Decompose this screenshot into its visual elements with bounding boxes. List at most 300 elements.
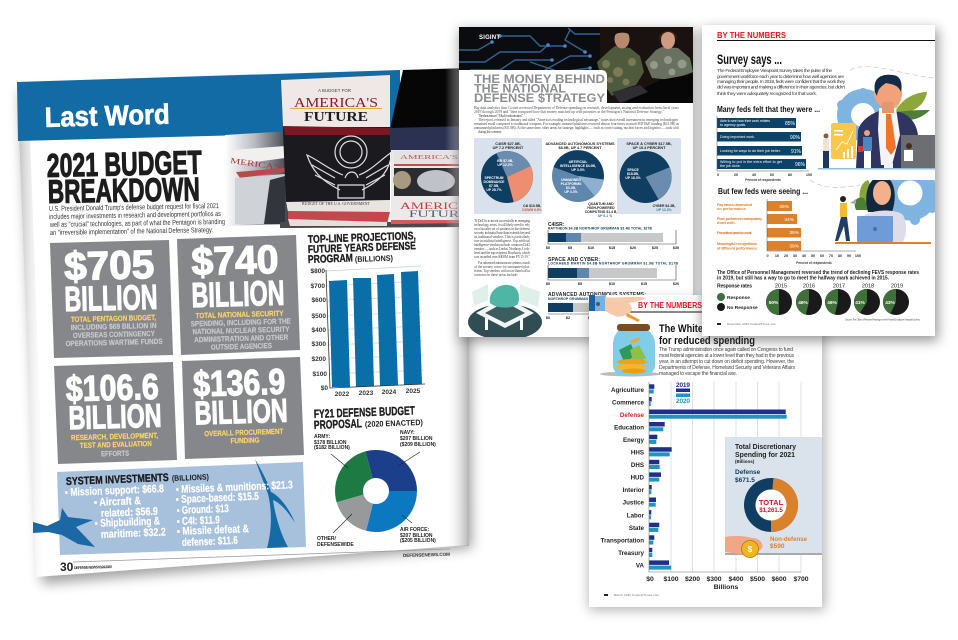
stat card: $740 billion: SPENDING, INCLUDING FOR THE [191, 317, 291, 328]
stacked bar: advanced autonomous systems vendors: NORTHROP GRUMMAN [548, 297, 589, 301]
category labels: Labor [627, 512, 645, 520]
page footer [60, 549, 450, 574]
bar chart: few feds seeing: 34% [784, 217, 795, 223]
icon: hand holding coin: $ [748, 545, 753, 554]
stacked bar: C4ISR vendors: C4ISR: [548, 222, 565, 228]
system investments list: related: $56.9 [101, 506, 158, 520]
bar chart: few feds seeing: 30 [793, 254, 797, 258]
bar chart: few feds seeing: 28% [779, 204, 790, 210]
category labels: Energy [623, 437, 645, 444]
bar chart: future years defense program: $500 [312, 313, 326, 320]
stat card: $740 billion: BILLION [191, 274, 285, 315]
body text: second column: security industrial base than extends beyond [474, 231, 530, 235]
title: The Money Behind the National Defense $trategy: DEFENSE $TRATEGY [474, 93, 605, 105]
stat card: $136.9 billion: OVERALL PROCUREMENT [204, 427, 284, 438]
body text: managed to escape the financial axe. [659, 371, 737, 377]
panel: C4ISR pie: UP 7.2 PERCENT [493, 146, 524, 150]
panel: space and cyber pie: UP 12.2% [656, 208, 672, 212]
bar chart: few feds seeing [717, 199, 861, 265]
axis labels: $300 [706, 576, 722, 583]
bar chart: many feds felt: 80 [788, 173, 792, 177]
axis labels: $600 [771, 576, 787, 583]
stacked bar: C4ISR vendors: $0 [546, 246, 550, 250]
bar chart: few feds seeing: of different performance. [717, 246, 758, 250]
bar chart: many feds felt: Looking for ways to do their job better. [720, 149, 781, 153]
body text: second column: on a broader set of partners in the defense [474, 227, 530, 231]
photo: budget books: AMERICA'S [294, 96, 378, 111]
stat card: $136.9 billion: FUNDING [230, 435, 260, 445]
body text: intro: during the winners: [478, 130, 502, 134]
bar chart: few feds seeing: 100 [855, 254, 861, 258]
photo: budget books: BUDGET OF THE U.S. GOVERNMENT [302, 202, 371, 206]
illustration: isometric brain platform [468, 284, 542, 340]
stacked bar: space and cyber vendors: $10 [609, 282, 615, 286]
bar chart: many feds felt: 100 [806, 173, 812, 177]
donut labels: $178 BILLION [314, 440, 347, 446]
icon: hand dropping coin [589, 295, 646, 322]
stacked bar: advanced autonomous systems vendors: $4 [588, 316, 593, 320]
heading: FY21 defense budget proposal: PROPOSAL [314, 416, 362, 432]
axis labels: $700 [793, 576, 809, 583]
panel: advanced autonomous systems pie: QUANTUM AND [588, 202, 614, 206]
panel: advanced autonomous systems pie: PLATFORMS [561, 182, 582, 186]
bar chart: many feds felt: Doing important work. [720, 135, 755, 139]
body text: second column: true in artificial intelligence. Top artificial [474, 239, 530, 243]
panel: advanced autonomous systems pie: UNMANNED [561, 178, 581, 182]
panel: C4ISR pie: UP 12.2% [497, 163, 513, 167]
bar chart: future years defense program: $400 [312, 327, 326, 334]
donut labels: $207 BILLION [400, 533, 433, 539]
bar chart: few feds seeing: dealt with. [717, 221, 736, 225]
system investments list: ▪ Missile defeat & [177, 523, 249, 538]
panel: C4ISR pie: SPECTRUM [484, 176, 504, 180]
page footer: December 2020 FederalTimes.com [727, 322, 777, 326]
stat card: $705 billion: OPERATIONS WARTIME FUNDS [65, 337, 163, 348]
donut labels: OTHER/ [317, 536, 336, 542]
donut: defense vs non-defense [744, 478, 798, 532]
panel: Last Word magazine page [17, 68, 472, 584]
pie charts: response rates by year: 41% [855, 300, 866, 306]
body text: second column: contracts in these areas include: [474, 273, 518, 277]
legend: 2019 and 2020 [676, 382, 690, 405]
bar chart: many feds felt: to agency goals. [720, 123, 746, 127]
stacked bar: advanced autonomous systems vendors: $2 [566, 316, 570, 320]
callout: total discretionary spending: Non-defense [770, 536, 807, 543]
bar chart: agency spending [601, 382, 809, 591]
category labels: Defense [620, 412, 645, 419]
body text: intro: unmanned platforms ($11.9B). At the same time, other areas for strategic highlights — such as cross-cutting, nuclear forces and logistics — took a hit [474, 126, 680, 131]
bar chart: few feds seeing: 40 [802, 254, 806, 258]
label: By the numbers: BY THE NUMBERS [638, 301, 703, 310]
heading: FY21 defense budget proposal [314, 403, 423, 432]
stacked bar: advanced autonomous systems vendors: ADVANCED AUTONOMOUS SYSTEMS: [548, 292, 646, 298]
legend: response rates: No Response [727, 305, 758, 311]
body text: second column: technology areas, it will likely need to rely [474, 223, 530, 228]
callout: total discretionary spending: (Billions) [735, 459, 755, 464]
body text: second column: For advanced autonomous systems, much [478, 261, 530, 266]
bar chart: many feds felt: 60 [770, 173, 774, 177]
donut: defense vs non-defense: TOTAL [759, 498, 784, 507]
bar chart: future years defense program [311, 266, 425, 398]
panel: advanced autonomous systems pie: $8.9B, UP 4.7 PERCENT [559, 146, 602, 150]
system investments list: ▪ Space-based: $15.5 [176, 491, 259, 506]
bar chart: future years defense program: $200 [312, 356, 326, 363]
axis labels: $0 [646, 576, 654, 583]
stacked bar: C4ISR vendors: $25 [652, 246, 658, 250]
callout: total discretionary spending: $590 [770, 543, 785, 550]
stat card: $136.9 billion: $136.9 [193, 361, 286, 405]
stacked bar: advanced autonomous systems vendors [546, 292, 676, 320]
system investments heading: SYSTEM INVESTMENTS [66, 472, 169, 488]
bar chart: few feds seeing: 50 [811, 254, 815, 258]
category labels: HHS [631, 450, 644, 456]
page footer: DEFENSE NEWS 03.24.2020 [74, 565, 112, 570]
pie charts: response rates by year [766, 284, 909, 315]
callout: total discretionary spending: Total Discretionary [735, 444, 796, 451]
panel: system investments [33, 459, 306, 555]
donut labels [314, 430, 436, 548]
category labels: DHS [631, 462, 644, 469]
panel: advanced autonomous systems pie: ARTIFICIAL [569, 160, 587, 164]
bar chart: future years defense program: $700 [311, 283, 325, 290]
category labels: Justice [623, 500, 645, 506]
header band: Last Word [17, 70, 400, 141]
legend: response rates: Response [727, 295, 750, 301]
text block: OPM response rates note [717, 270, 919, 282]
stacked bar: space and cyber vendors: SPACE AND CYBER: [548, 257, 600, 263]
stacked bar: C4ISR vendors: $5 [568, 246, 572, 250]
category labels: Treasury [618, 550, 645, 557]
illustration: businessman with gear and charts [818, 67, 935, 170]
bar chart: future years defense program: $300 [312, 341, 326, 348]
panel: advanced autonomous systems pie [545, 142, 617, 218]
pie charts: response rates by year: 2017 [833, 284, 845, 290]
panel: advanced autonomous systems pie: COMPUTING $1.4 B, [585, 210, 617, 214]
page footer: Source: The Office of Personnel Management's Federal Employee Viewpoint Survey [845, 318, 921, 322]
bar chart: future years defense program: 2024 [382, 389, 397, 396]
legend: 2019 and 2020: 2020 [676, 398, 690, 405]
intro paragraph: includes major investments in research and development portfolios as [49, 209, 221, 221]
pie charts: response rates by year: 2019 [891, 284, 903, 290]
heading: top-line projections: PROGRAM [308, 252, 353, 266]
panel: advanced autonomous systems pie: UP 6.1 % [598, 214, 612, 218]
system investments list: ▪ Shipbuilding & [95, 515, 160, 530]
bar chart: many feds felt [717, 116, 812, 182]
bar chart: few feds seeing: 39% [789, 244, 800, 250]
photo: budget books [225, 68, 469, 228]
body text: The Federal Employee Viewpoint Survey takes the pulse of the [717, 68, 832, 74]
stat card: $106.6 billion: BILLION [68, 397, 162, 436]
stacked bar: space and cyber vendors [546, 257, 679, 286]
system investments list: defense: $11.6 [182, 535, 238, 549]
body text: intro [474, 106, 680, 134]
stat card: $106.6 billion: EFFORTS [101, 449, 129, 458]
text block: OPM response rates note: The Office of Personnel Management reversed the trend of declining FEVS response rates [717, 270, 919, 276]
header band: Last Word: Last Word [44, 99, 170, 133]
heading: The White House calls for reduced spending: The White [659, 323, 703, 335]
callout: total discretionary spending: Defense [735, 469, 761, 476]
title: The Money Behind the National Defense $trategy: THE MONEY BEHIND [474, 74, 605, 86]
panel: advanced autonomous systems pie: INTELLIGENCE $4.0B, [560, 164, 596, 168]
panel: C4ISR pie: ISR $7.9B, [497, 159, 513, 163]
stacked bar: advanced autonomous systems vendors: $0 [546, 316, 550, 320]
body text: government workforce each year to determine how well agencies are [717, 74, 844, 80]
body text: second column: vendors — such as Leidos, Northrop, Lock- [474, 247, 531, 252]
photo: budget books: AMERIC [400, 201, 458, 211]
heading: 2021 Budget Breakdown [46, 143, 202, 210]
stat card: $740 billion: TOTAL NATIONAL SECURITY [195, 309, 284, 320]
bar chart: many feds felt: 0 [717, 173, 719, 177]
bar chart: future years defense program: $100 [313, 371, 327, 378]
body text: second column: its traditional vendors. This is particularly [474, 235, 530, 239]
body text: second column: "If DoD is to invest successfully in emerging [474, 219, 530, 223]
heading: Survey says: Survey says ... [717, 51, 782, 67]
stacked bar: space and cyber vendors: $20 [673, 282, 679, 286]
legend: response rates: Response rates [717, 284, 752, 290]
panel: SIGINT magazine page [459, 27, 695, 342]
heading: But few feds were seeing: But few feds were seeing ... [718, 186, 808, 196]
category labels: HUD [631, 474, 645, 482]
stat card: $740 billion: $740 [191, 238, 279, 284]
icon: money jar [600, 324, 660, 376]
panel: C4ISR pie: C4I $10.5B, [523, 204, 541, 208]
photo: budget books: FUTURE [304, 110, 368, 125]
system investments list: ▪ Mission support: $66.8 [65, 483, 164, 499]
heading: top-line projections: (BILLIONS) [355, 254, 393, 264]
bar chart: many feds felt: 90% [790, 135, 801, 141]
label: SIGINT: SIGINT [479, 35, 500, 41]
donut labels: ($182 BILLION) [314, 445, 350, 451]
body text: intro: 2019 through 2019 and "then compared how that money matched up with priorities in the Pentagon's National Defense Strategy." [474, 110, 664, 114]
body text: intro: The report, released in January and titled "America's eroding technological advantage," notes that overall investment in emerging technologies [478, 118, 679, 123]
stacked bar: space and cyber vendors: LOCKHEED MARTIN $4.8B NORTHROP GRUMMAN $1.9B TOTAL $17B [548, 262, 679, 266]
stat card: $106.6 billion: RESEARCH, DEVELOPMENT, [71, 431, 158, 442]
donut labels: DEFENSEWIDE [317, 542, 354, 548]
donut chart: defense budget by service [314, 430, 436, 548]
axis labels: $100 [663, 576, 679, 583]
panel: C4ISR pie: C4ISR $27.8B, [495, 142, 521, 146]
bar chart: future years defense program: $600 [312, 297, 326, 304]
body text: year, in an attempt to cut down on deficit spending. However, the [659, 359, 794, 365]
body text: second column: forms. Top vendors with more than half in [474, 269, 530, 273]
title: The Money Behind the National Defense $trategy [459, 70, 607, 105]
heading: top-line projections: FUTURE YEARS DEFENSE [308, 240, 416, 256]
panel: By the Numbers survey page [702, 25, 938, 341]
body text: did was important and making a difference in their agencies, but didn't [717, 84, 846, 90]
stat card: $136.9 billion: BILLION [194, 392, 288, 432]
bar chart: many feds felt: 91% [791, 149, 802, 155]
stat card: $106.6 billion: $106.6 [65, 366, 159, 409]
body text: second column [474, 219, 531, 277]
heading: top-line projections [308, 230, 416, 266]
page footer [717, 318, 921, 326]
bar chart: many feds felt: 40 [752, 173, 756, 177]
heading: 2021 Budget Breakdown: BREAKDOWN [47, 170, 200, 210]
panel: space and cyber pie: UP 18.3% [625, 176, 641, 180]
bar chart: future years defense program: $800 [311, 268, 325, 275]
category labels: Transportation [601, 538, 644, 544]
bar chart: future years defense program: 2025 [406, 388, 421, 395]
body text: The Trump administration once again called on Congress to fund [659, 347, 793, 353]
bar chart: few feds seeing: 20 [784, 254, 788, 258]
body text: Departments of Defense, Homeland Security and Veterans Affairs [659, 365, 796, 371]
body text: managing their people. In 2019, feds were confident that the work they [717, 79, 846, 85]
stacked bar: C4ISR vendors: $30 [673, 246, 679, 250]
bar chart: many feds felt: Willing to put in the extra effort to get [720, 160, 782, 164]
donut labels: AIR FORCE: [400, 527, 430, 533]
heading: FY21 defense budget proposal: FY21 DEFENSE BUDGET [314, 403, 416, 421]
system investments list [65, 479, 293, 549]
category labels: Agriculture [611, 387, 645, 394]
axis labels [646, 576, 809, 591]
bar chart: few feds seeing: 80 [838, 254, 842, 258]
stat card: $136.9 billion [182, 357, 304, 459]
panel: advanced autonomous systems pie: UP 3.3% [564, 190, 578, 194]
photo: budget books: A BUDGET FOR [318, 88, 352, 93]
intro paragraph: well as "crucial" technologies, as part of what the Pentagon is branding [49, 217, 225, 229]
bar chart: many feds felt: the job done. [720, 164, 741, 168]
bar chart: many feds felt: 96% [795, 162, 806, 168]
bar chart: few feds seeing: on performance. [717, 207, 747, 211]
body text: second column: intelligence vendors include common DoD [474, 243, 530, 247]
body text: intro: The short answer: "Much work remains." [478, 114, 523, 118]
page footer: 30 [60, 560, 74, 574]
body text [659, 347, 796, 377]
page footer: March 2020 FederalTimes.com [614, 593, 660, 597]
pie charts: response rates by year: 46% [798, 300, 809, 306]
bar chart: few feds seeing: 39% [789, 230, 800, 236]
axis labels: Billions [714, 584, 738, 591]
stat card: $740 billion: ADMINISTRATION AND OTHER [194, 333, 289, 344]
illustration: woman at laptop [810, 180, 935, 244]
system investments list: maritime: $32.2 [101, 526, 166, 541]
heading: 2021 Budget Breakdown: 2021 BUDGET [46, 143, 202, 184]
heading: Many feds felt: Many feds felt that they were ... [717, 104, 820, 114]
category labels: Education [614, 424, 644, 432]
bar chart: few feds seeing: 0 [766, 254, 769, 258]
intro paragraph [49, 201, 225, 237]
body text: intro: Big data analytics firm Govini reviewed Department of Defense spending on research, development, testing and evaluation from fiscal years [474, 106, 680, 111]
bar chart: few feds seeing: Pay raises dependent [717, 203, 753, 207]
icon: fighter jet [33, 508, 95, 547]
panel: advanced autonomous systems pie: ADVANCED AUTONOMOUS SYSTEMS [545, 142, 615, 146]
header photo: soldiers and circuit board [459, 27, 693, 103]
pie charts: response rates by year: 50% [769, 300, 779, 306]
label: By the numbers: BY THE NUMBERS [717, 31, 787, 40]
bar chart: many feds felt: 20 [734, 173, 738, 177]
category labels [601, 387, 645, 570]
system investments list: ▪ C4I: $11.9 [177, 514, 220, 528]
text block: OPM response rates note: in 2019, but still has a way to go to meet the halfway mark achieved in 2015. [717, 276, 889, 282]
panel: space and cyber pie: $18.5B, [627, 172, 639, 176]
stacked bar: C4ISR vendors: RAYTHEON $4.3B NORTHROP GRUMMAN $3.4B TOTAL $27B [548, 226, 653, 230]
stat card: $705 billion: OVERSEAS CONTINGENCY [73, 329, 155, 340]
panel: White House reduced spending page [589, 295, 825, 610]
stacked bar: C4ISR vendors: $10 [588, 246, 594, 250]
body text: second column: was awarded over $400M from FY15-19." [474, 255, 530, 259]
page footer: DEFENSENEWS.COM [403, 552, 450, 558]
bar chart: many feds felt: Percent of respondents [745, 178, 781, 182]
panel: C4ISR pie: UP 28.7% [486, 188, 502, 192]
body text: second column: heed and the top recipient, Raytheon, which [474, 251, 530, 256]
heading: The White House calls for reduced spending: for reduced spending [659, 335, 755, 347]
title: The Money Behind the National Defense $trategy: THE NATIONAL [474, 84, 566, 96]
system investments heading: (BILLIONS) [172, 473, 209, 483]
photo: budget books: AMERICA'S [400, 155, 458, 161]
heading: top-line projections: TOP-LINE PROJECTIONS, [308, 230, 416, 246]
panel: C4ISR pie: $7.9B, [489, 184, 499, 188]
stacked bar: C4ISR vendors: $15 [609, 246, 615, 250]
bar chart: many feds felt: 85% [785, 121, 796, 127]
bar chart: few feds seeing: Promotions based on merit. [717, 231, 752, 235]
pie charts: response rates by year: 46% [827, 300, 838, 306]
axis labels: $200 [685, 576, 700, 583]
category labels: Commerce [612, 400, 645, 406]
panel: space and cyber pie [617, 138, 681, 214]
category labels: Interior [623, 487, 645, 494]
stat card: $106.6 billion [54, 362, 177, 464]
system investments list: ▪ Ground: $13 [177, 503, 229, 517]
body text: intro: remained small compared to traditional weapons. For example, manned platforms received almost four times as much RDT&E funding ($41.9B) as [474, 122, 680, 127]
panel: space and cyber pie: SPACE [627, 168, 639, 172]
category labels: VA [636, 562, 645, 570]
pie charts: response rates by year: 2015 [775, 284, 787, 290]
stacked bar: C4ISR vendors [546, 222, 679, 250]
bar chart: few feds seeing: 70 [829, 254, 833, 258]
pie charts: response rates by year: 2016 [803, 284, 815, 290]
body text: most federal agencies at a lower level than they had in the previous [659, 353, 794, 359]
panel: advanced autonomous systems pie: UP 3.3% [571, 168, 585, 172]
stat card: $705 billion: TOTAL PENTAGON BUDGET, [71, 313, 156, 324]
category labels: State [629, 525, 645, 532]
body text [717, 68, 846, 97]
panel: space and cyber pie: CYBER $4.3B, [653, 204, 675, 208]
donut labels: ($205 BILLION) [400, 538, 436, 544]
icon: missile and exhaust [255, 459, 295, 548]
photo: budget books: FUTUR [409, 209, 459, 219]
axis labels: $400 [728, 576, 744, 583]
pie charts: response rates by year: 2018 [862, 284, 874, 290]
system investments list: ▪ Missiles & munitions: $21.3 [176, 479, 293, 496]
body text: second column: of the money come for unmanned plat- [474, 265, 531, 269]
bar chart: few feds seeing: Poor performers adequately [717, 217, 763, 221]
stat card: $705 billion [50, 240, 173, 358]
intro paragraph: U.S. President Donald Trump's defense budget request for fiscal 2021 [49, 201, 219, 213]
callout: total discretionary spending: Spending for 2021 [735, 452, 795, 459]
intro paragraph: an "irreversible implementation" of the National Defense Strategy. [50, 225, 213, 237]
axis labels: $500 [750, 576, 765, 583]
donut: defense vs non-defense: $1,261.5 [759, 508, 783, 514]
legend: 2019 and 2020: 2019 [676, 382, 690, 389]
stat card: $705 billion: BILLION [64, 278, 158, 319]
bar chart: future years defense program: $0 [321, 385, 328, 392]
callout: total discretionary spending [725, 437, 822, 558]
stat card: $740 billion: OUTSIDE AGENCIES [211, 341, 272, 352]
heading: FY21 defense budget proposal: (2020 ENACTED) [365, 418, 423, 429]
bar chart: few feds seeing: Meaningful recognitions [717, 242, 757, 246]
stat card: $740 billion [177, 235, 300, 355]
photo: budget books: MERICA'S [230, 156, 282, 172]
panel: C4ISR pie: DOMINANCE [484, 180, 505, 184]
bar chart: few feds seeing: 90 [847, 254, 851, 258]
donut labels: NAVY: [400, 430, 415, 436]
donut labels: ($209 BILLION) [400, 442, 436, 448]
bar chart: few feds seeing: 60 [820, 254, 824, 258]
stat card: $106.6 billion: TEST AND EVALUATION [80, 439, 152, 450]
stacked bar: space and cyber vendors: $5 [578, 282, 582, 286]
heading: The White House calls for reduced spending [659, 323, 755, 347]
panel: advanced autonomous systems pie: $3.4B, [566, 186, 576, 190]
